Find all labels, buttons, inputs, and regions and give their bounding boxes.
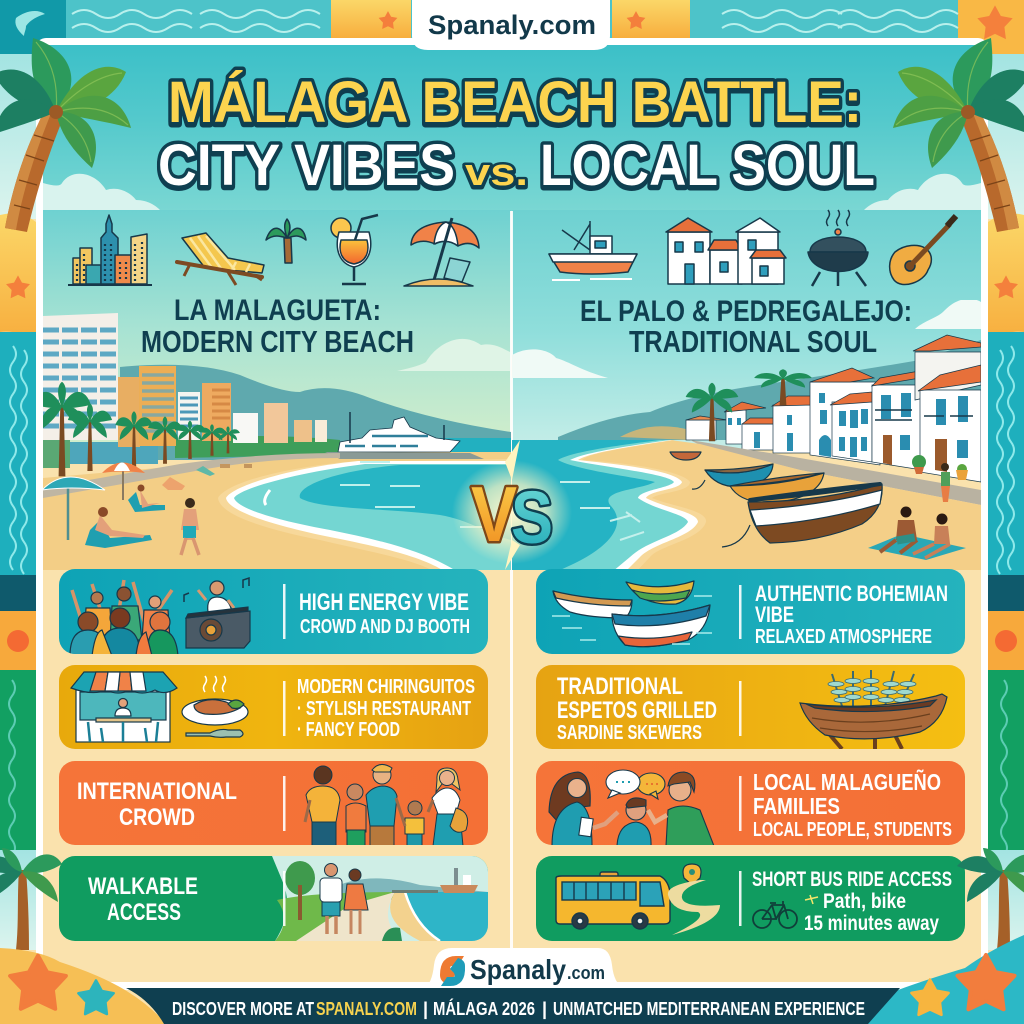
panel: traditional espetos xyxy=(536,665,965,749)
icon: yellow bus xyxy=(556,872,670,929)
brand tab top xyxy=(412,0,610,50)
text xyxy=(753,768,952,841)
text: INTERNATIONAL xyxy=(77,778,237,805)
village houses xyxy=(686,335,981,482)
cruise ship xyxy=(325,412,484,459)
hotel tower xyxy=(43,313,158,468)
text: MODERN CHIRINGUITOS xyxy=(297,676,475,698)
sea and shore xyxy=(218,459,511,575)
text: FAMILIES xyxy=(753,793,840,819)
icon: white village houses xyxy=(666,218,786,284)
text: LOCAL PEOPLE, STUDENTS xyxy=(753,819,952,841)
icon: small sparkle xyxy=(805,895,818,904)
icon: beach umbrella xyxy=(404,218,479,286)
text: WALKABLE xyxy=(88,873,198,900)
sea horizon left xyxy=(440,438,511,452)
VS badge: V xyxy=(471,470,517,558)
icon: plated food xyxy=(182,676,248,737)
brand tab bottom xyxy=(424,948,624,988)
VS badge: S xyxy=(511,476,553,559)
icon: beach bar stall xyxy=(71,672,177,742)
panel: modern chiringuitos xyxy=(59,665,488,749)
text xyxy=(557,673,717,744)
promenade xyxy=(43,453,340,498)
text: CROWD xyxy=(119,804,195,831)
text: · STYLISH RESTAURANT xyxy=(297,698,471,720)
icon: walking couple xyxy=(320,864,368,934)
title xyxy=(158,70,875,198)
title: CITY VIBES xyxy=(158,133,455,198)
panel: local families xyxy=(536,761,965,846)
brand tab top: Spanaly.com xyxy=(428,10,596,40)
cloud xyxy=(397,339,510,371)
sunbathers and walker xyxy=(85,464,252,555)
left icon row xyxy=(68,215,479,286)
text: LOCAL MALAGUEÑO xyxy=(753,768,941,795)
text: ESPETOS GRILLED xyxy=(557,697,717,724)
text: TRADITIONAL xyxy=(557,673,683,700)
icon: sun lounger xyxy=(177,233,264,285)
left decorative side strip xyxy=(0,54,36,950)
sand xyxy=(43,452,511,570)
illustration: seaside walk xyxy=(272,856,488,941)
icon: cocktail xyxy=(331,215,378,284)
text: HIGH ENERGY VIBE xyxy=(299,589,469,616)
title: MÁLAGA BEACH BATTLE: xyxy=(168,70,862,135)
icon: family group xyxy=(305,764,468,846)
text xyxy=(77,778,237,831)
icon: speech bubbles xyxy=(606,770,665,799)
icon: three boats xyxy=(552,581,712,647)
sand xyxy=(582,440,981,570)
palm tree: bottom right xyxy=(957,848,1024,950)
brand tab bottom: .com xyxy=(567,963,605,983)
text xyxy=(297,676,475,741)
text xyxy=(88,873,198,926)
left subheading: LA MALAGUETA: xyxy=(174,294,381,327)
sea xyxy=(512,440,706,572)
cloud right xyxy=(915,299,981,329)
palm tree: bottom left xyxy=(0,848,62,950)
mountains xyxy=(558,340,981,440)
panel: bohemian vibe xyxy=(536,569,965,654)
corner: sand with starfish xyxy=(0,948,166,1024)
panel: short bus ride xyxy=(536,856,965,941)
text xyxy=(755,581,948,648)
beached boats xyxy=(670,452,882,547)
footer bar: DISCOVER MORE AT xyxy=(172,999,314,1019)
footer bar: | xyxy=(542,999,547,1019)
top decorative border xyxy=(0,0,1024,54)
icon: city skyline xyxy=(68,215,152,285)
orange apartment blocks xyxy=(118,366,327,447)
promenade palms xyxy=(33,382,240,476)
text: AUTHENTIC BOHEMIAN xyxy=(755,581,948,606)
right icon row xyxy=(549,210,956,286)
left subheading xyxy=(141,294,414,359)
icon: grill xyxy=(808,210,868,286)
icon: fishing boat xyxy=(549,221,637,280)
icon: guitar xyxy=(890,216,956,285)
palm tree: top left xyxy=(0,38,131,232)
mountains xyxy=(120,365,511,460)
text: VIBE xyxy=(755,602,794,627)
footer bar: SPANALY.COM xyxy=(316,999,417,1019)
VS badge xyxy=(452,440,572,570)
text xyxy=(752,868,952,935)
footer bar: | xyxy=(423,999,428,1019)
corner: surf with starfish xyxy=(866,935,1024,1024)
text: RELAXED ATMOSPHERE xyxy=(755,626,932,648)
scene: El Palo beach xyxy=(512,299,981,572)
icon: party crowd xyxy=(70,580,178,656)
wooden doors and balconies xyxy=(875,410,973,472)
right subheading: TRADITIONAL SOUL xyxy=(629,324,877,359)
scene: La Malagueta beach xyxy=(33,313,511,575)
text: Path, bike xyxy=(823,890,906,913)
text: SHORT BUS RIDE ACCESS xyxy=(752,868,952,891)
panel: walkable access xyxy=(59,856,488,941)
icon: espeto boat xyxy=(800,670,947,749)
palms xyxy=(686,369,812,441)
palm tree: top right xyxy=(893,38,1024,232)
brand tab bottom: Spanaly xyxy=(470,954,566,985)
icon: palm tree xyxy=(266,219,306,263)
right decorative side strip xyxy=(988,54,1024,950)
cloud: top right xyxy=(864,174,981,210)
walker and plants xyxy=(912,455,968,502)
title: LOCAL SOUL xyxy=(540,133,875,198)
green strip behind promenade xyxy=(175,436,340,458)
couple on towel xyxy=(868,506,966,560)
title: vs. xyxy=(465,152,528,194)
center divider xyxy=(510,211,513,983)
icon: bicycle xyxy=(753,901,797,928)
text: SARDINE SKEWERS xyxy=(557,722,702,744)
promenade xyxy=(690,440,981,505)
text xyxy=(299,589,470,638)
footer bar: MÁLAGA 2026 xyxy=(433,998,535,1019)
right subheading xyxy=(580,295,912,359)
text: CROWD AND DJ BOOTH xyxy=(300,616,470,638)
footer bar xyxy=(126,988,900,1024)
icon: DJ booth xyxy=(184,578,250,648)
footer bar: UNMATCHED MEDITERRANEAN EXPERIENCE xyxy=(553,999,865,1019)
beach umbrellas xyxy=(42,462,145,540)
panel: high energy vibe xyxy=(59,569,488,656)
icon: talking family xyxy=(549,772,714,846)
panel: international crowd xyxy=(59,761,488,846)
icon: map pin and winding road xyxy=(668,864,720,935)
right subheading: EL PALO & PEDREGALEJO: xyxy=(580,295,912,328)
text: 15 minutes away xyxy=(804,912,939,935)
cloud left xyxy=(512,349,608,378)
house windows and doors xyxy=(728,393,968,458)
text: · FANCY FOOD xyxy=(297,719,400,741)
cloud: top left xyxy=(43,174,160,210)
logo mark xyxy=(440,956,465,986)
left subheading: MODERN CITY BEACH xyxy=(141,324,414,359)
text: ACCESS xyxy=(107,899,181,926)
